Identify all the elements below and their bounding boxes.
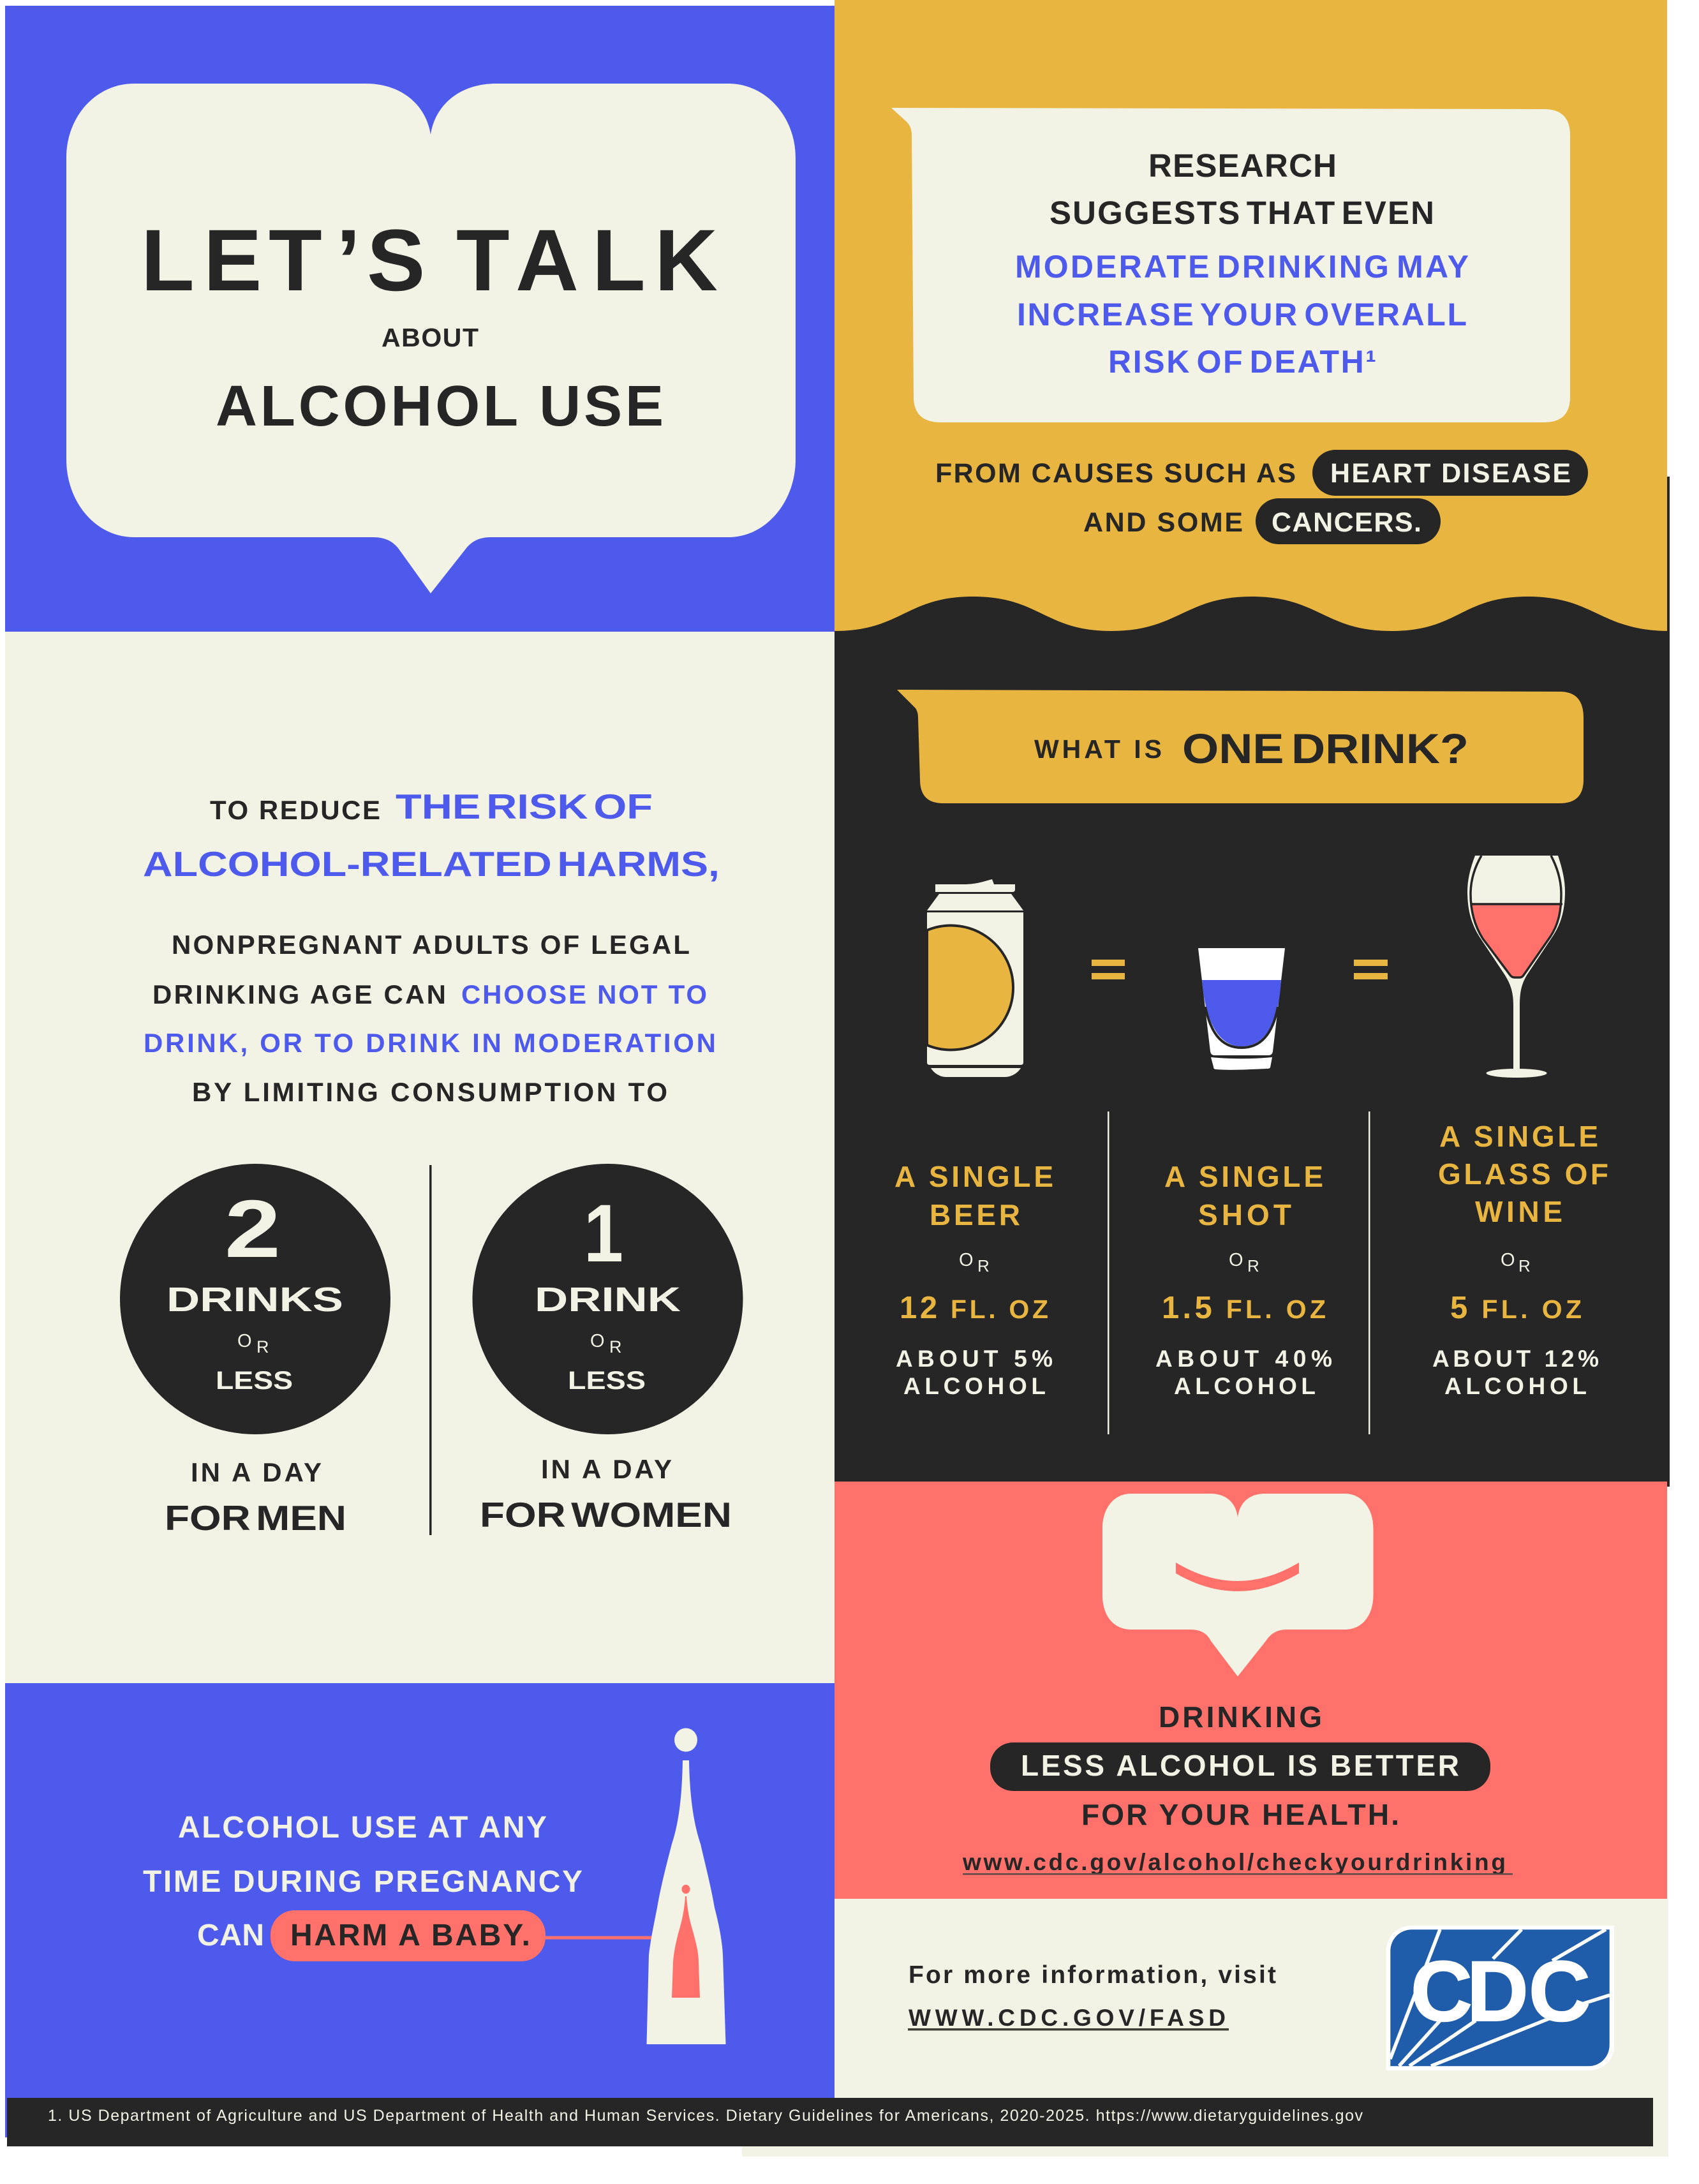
pill: heart disease: HEART DISEASE bbox=[1330, 458, 1571, 489]
badge: women: DRINK bbox=[535, 1281, 681, 1319]
column: shot: 1.5 FL. OZ bbox=[1162, 1291, 1326, 1325]
pill: cancers bbox=[1256, 498, 1441, 544]
connector line bbox=[545, 1936, 679, 1940]
text: for more information: For more information, visit bbox=[909, 1961, 1276, 1989]
icon: beer can bbox=[927, 879, 1023, 1077]
column: beer: BEER bbox=[930, 1198, 1020, 1231]
badge: men: O bbox=[237, 1331, 252, 1351]
pill: less alcohol is better bbox=[990, 1742, 1490, 1791]
text: moderate drinking risk: INCREASE YOUR OVERALL bbox=[1017, 297, 1467, 332]
footnote bar bbox=[7, 2098, 1653, 2146]
icon: wine glass bbox=[1467, 856, 1565, 1078]
badge: women bbox=[472, 1164, 743, 1434]
logo: cdc: CDC bbox=[1411, 1944, 1591, 2039]
text: alcohol use during pregnancy: CAN bbox=[197, 1919, 264, 1952]
text: guidance: DRINKING AGE CAN bbox=[152, 979, 446, 1009]
badge: women: LESS bbox=[568, 1367, 646, 1395]
icon: baby bottle silhouette bbox=[672, 1885, 700, 1998]
label: for men bbox=[165, 1457, 346, 1538]
subtitle: about: ABOUT bbox=[382, 323, 479, 352]
panel: more information bbox=[742, 1899, 1668, 2157]
column: wine: A SINGLE bbox=[1439, 1120, 1598, 1153]
speech bubble: what is one drink bbox=[897, 690, 1584, 803]
pill: harm a baby: HARM A BABY. bbox=[290, 1919, 530, 1952]
badge: women: 1 bbox=[584, 1188, 623, 1279]
column: beer: ALCOHOL bbox=[903, 1373, 1046, 1399]
column: shot: ABOUT 40% bbox=[1155, 1346, 1332, 1372]
heading: reduce the risk: ALCOHOL-RELATED HARMS, bbox=[143, 844, 720, 884]
column: shot: ALCOHOL bbox=[1174, 1373, 1316, 1399]
column: shot: R bbox=[1247, 1256, 1259, 1275]
column: beer: 12 FL. OZ bbox=[900, 1291, 1048, 1325]
column: wine bbox=[1432, 1120, 1608, 1399]
label: for women bbox=[480, 1454, 732, 1534]
text: moderate drinking risk bbox=[1015, 249, 1469, 380]
column: shot: SHOT bbox=[1198, 1198, 1291, 1231]
text: and some: AND SOME bbox=[1083, 507, 1243, 538]
panel: research bbox=[835, 0, 1667, 635]
text: alcohol use during pregnancy: TIME DURING PREGNANCY bbox=[143, 1865, 582, 1899]
column: beer bbox=[894, 1160, 1053, 1399]
column: shot bbox=[1155, 1160, 1332, 1399]
text: drinking: DRINKING bbox=[1159, 1700, 1322, 1734]
panel: one drink bbox=[835, 477, 1670, 1487]
label: for women: IN A DAY bbox=[541, 1454, 672, 1484]
label: for men: IN A DAY bbox=[191, 1457, 322, 1487]
text: alcohol use during pregnancy: ALCOHOL USE AT ANY bbox=[178, 1811, 547, 1845]
badge: men bbox=[120, 1164, 390, 1434]
text: from causes such as: FROM CAUSES SUCH AS bbox=[935, 458, 1296, 489]
divider line bbox=[429, 1165, 431, 1535]
logo: cdc bbox=[1386, 1926, 1614, 2070]
badge: women: O bbox=[590, 1331, 605, 1351]
link: cdc fasd: WWW.CDC.GOV/FASD bbox=[909, 2005, 1226, 2031]
link: check your drinking: www.cdc.gov/alcohol/checkyourdrinking bbox=[962, 1849, 1506, 1875]
icon: shot glass bbox=[1198, 948, 1285, 1070]
heading: reduce the risk: TO REDUCE bbox=[210, 795, 380, 825]
badge: men: DRINKS bbox=[167, 1281, 343, 1319]
badge: men: LESS bbox=[216, 1367, 293, 1395]
title: let's talk: LET’S TALK bbox=[141, 212, 718, 309]
column: shot: A SINGLE bbox=[1164, 1160, 1323, 1193]
column: wine: ALCOHOL bbox=[1444, 1373, 1587, 1399]
speech bubble: smile bbox=[1102, 1494, 1373, 1677]
text: guidance bbox=[144, 930, 716, 1107]
text: guidance: CHOOSE NOT TO bbox=[461, 979, 707, 1009]
badge: men: R bbox=[256, 1337, 269, 1356]
text: alcohol use during pregnancy bbox=[143, 1811, 582, 1952]
footnote bar: 1. US Department of Agriculture and US Department of Health and Human Services. Dietary Guidelines for Americans, 2020-2025. https://www.dietaryguidelines.gov bbox=[48, 2107, 1363, 2125]
column: beer: ABOUT 5% bbox=[896, 1346, 1053, 1372]
panel: title bbox=[5, 6, 835, 632]
column: wine: R bbox=[1518, 1256, 1531, 1275]
pill: cancers: CANCERS. bbox=[1272, 507, 1421, 538]
pill: harm a baby bbox=[271, 1910, 545, 1961]
speech bubble: title bbox=[66, 84, 796, 593]
label: for women: FOR WOMEN bbox=[480, 1495, 732, 1534]
text: moderate drinking risk: RISK OF DEATH¹ bbox=[1108, 344, 1376, 380]
title: alcohol use: ALCOHOL USE bbox=[216, 375, 664, 438]
column: beer: R bbox=[977, 1256, 990, 1275]
column dividers bbox=[1108, 1111, 1370, 1434]
pill: heart disease bbox=[1312, 450, 1588, 496]
heading: reduce the risk bbox=[143, 787, 720, 884]
column: wine: O bbox=[1501, 1250, 1515, 1270]
heading: reduce the risk: THE RISK OF bbox=[396, 787, 653, 826]
panel: limits bbox=[5, 632, 835, 1683]
badge: men: 2 bbox=[225, 1184, 281, 1275]
column: shot: O bbox=[1229, 1250, 1243, 1270]
badge: women: R bbox=[609, 1337, 621, 1356]
column: beer: O bbox=[959, 1250, 974, 1270]
text: guidance: NONPREGNANT ADULTS OF LEGAL bbox=[172, 930, 690, 960]
panel: less is better bbox=[835, 1482, 1667, 1899]
text: moderate drinking risk: MODERATE DRINKING MAY bbox=[1015, 249, 1469, 285]
label: for men: FOR MEN bbox=[165, 1498, 346, 1538]
pill: less alcohol is better: LESS ALCOHOL IS BETTER bbox=[1021, 1749, 1459, 1782]
column: wine: WINE bbox=[1475, 1195, 1562, 1228]
icon: pregnant silhouette bbox=[647, 1728, 726, 2044]
column: wine: GLASS OF bbox=[1438, 1157, 1608, 1191]
icon: equals sign bbox=[1092, 960, 1125, 979]
icon: equals sign bbox=[1354, 960, 1388, 979]
text: research suggests: RESEARCH bbox=[1148, 147, 1337, 184]
text: guidance: BY LIMITING CONSUMPTION TO bbox=[192, 1077, 667, 1107]
column: wine: 5 FL. OZ bbox=[1450, 1291, 1582, 1325]
speech bubble: research bbox=[891, 108, 1570, 422]
text: research suggests: SUGGESTS THAT EVEN bbox=[1050, 195, 1434, 231]
text: guidance: DRINK, OR TO DRINK IN MODERATION bbox=[144, 1028, 716, 1058]
speech bubble: what is one drink: WHAT IS bbox=[1034, 734, 1162, 764]
text: for your health: FOR YOUR HEALTH. bbox=[1081, 1798, 1399, 1831]
speech bubble: what is one drink: ONE DRINK? bbox=[1182, 725, 1469, 772]
text: research suggests bbox=[1050, 147, 1434, 231]
panel: pregnancy bbox=[5, 1683, 835, 2137]
column: beer: A SINGLE bbox=[894, 1160, 1053, 1193]
column: wine: ABOUT 12% bbox=[1432, 1346, 1599, 1372]
